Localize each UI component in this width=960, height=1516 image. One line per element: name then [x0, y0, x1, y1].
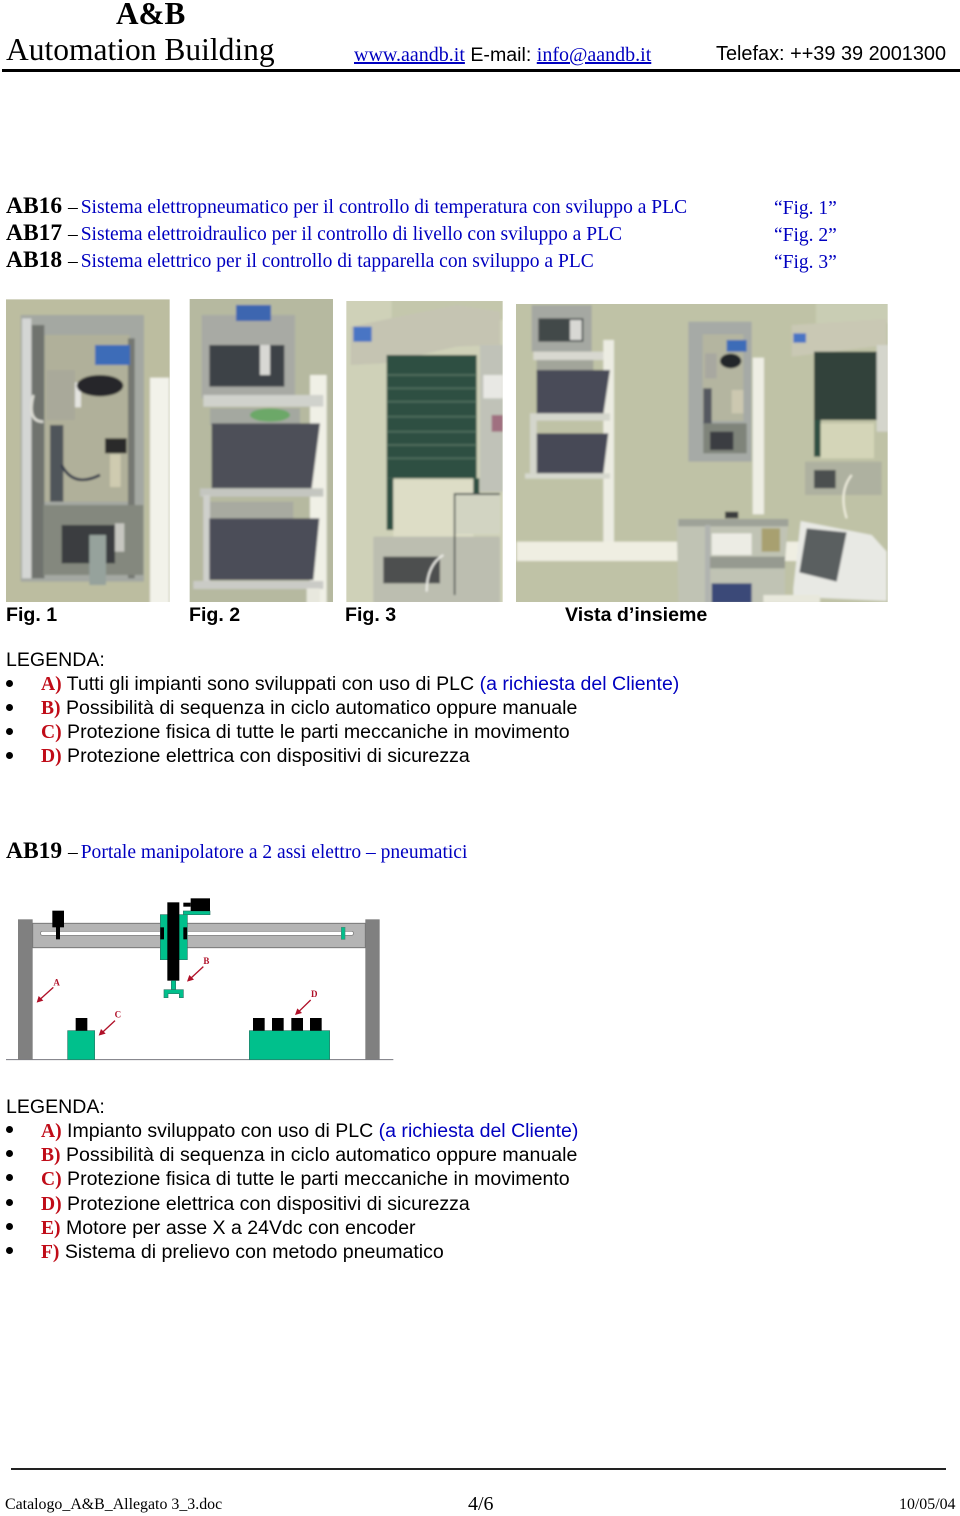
footer — [5, 1468, 956, 1515]
right block with sensors — [249, 1018, 330, 1060]
legend 2 item D: D) Protezione elettrica con dispositivi di sicurezza — [41, 1193, 470, 1215]
floor line — [6, 1058, 393, 1061]
figure captions — [6, 604, 707, 626]
callout arrows and letters: A — [53, 977, 60, 987]
photo: Fig. 3 roller shutter — [343, 298, 505, 605]
header rule — [2, 69, 960, 72]
legend 1 heading: LEGENDA: — [6, 649, 105, 671]
beam with slot — [33, 923, 365, 948]
legend 2 item C: C) Protezione fisica di tutte le parti meccaniche in movimento — [41, 1168, 570, 1190]
photo: Fig. 2 hydraulic rig — [187, 297, 335, 605]
left end motor — [52, 911, 64, 939]
legend 2 — [6, 1096, 578, 1263]
legend 2 heading: LEGENDA: — [6, 1096, 105, 1118]
legend 1 — [6, 649, 679, 767]
photo: overview of all rigs — [513, 302, 892, 605]
callout arrows and letters: D — [311, 989, 318, 999]
callout arrows and letters — [37, 956, 318, 1036]
AB16 figure reference: “Fig. 1” — [774, 198, 837, 219]
header: company name and contacts — [2, 0, 960, 72]
file name: Catalogo_A&B_Allegato 3_3.doc — [5, 1496, 222, 1513]
caption: Fig. 3: Fig. 3 — [345, 604, 396, 626]
legend 1 item A: A) Tutti gli impianti sono sviluppati con uso di PLC (a richiesta del Cliente) — [41, 673, 679, 695]
right end stop — [341, 927, 345, 939]
callout arrows and letters: B — [203, 956, 209, 966]
photo: Fig. 1 control panel — [3, 297, 173, 605]
AB18 line: AB18 – Sistema elettrico per il controllo di tapparella con sviluppo a PLC — [6, 247, 594, 273]
carriage with vertical axis and gripper — [160, 898, 210, 998]
legend 2 item B: B) Possibilità di sequenza in ciclo automatico oppure manuale — [41, 1144, 577, 1166]
AB19 heading: AB19 – Portale manipolatore a 2 assi elettro – pneumatici — [6, 838, 467, 864]
photo row — [6, 299, 888, 602]
legend 2 item E: E) Motore per asse X a 24Vdc con encoder — [41, 1217, 416, 1239]
web and email links: www.aandb.it E-mail: info@aandb.it — [354, 44, 651, 66]
left block with sensor — [68, 1018, 95, 1060]
AB17 line: AB17 – Sistema elettroidraulico per il controllo di livello con sviluppo a PLC — [6, 220, 622, 246]
caption: Fig. 1: Fig. 1 — [6, 604, 57, 626]
legend 1 item B: B) Possibilità di sequenza in ciclo automatico oppure manuale — [41, 697, 577, 719]
caption: Vista d'insieme: Vista d’insieme — [565, 604, 707, 626]
caption: Fig. 2: Fig. 2 — [189, 604, 240, 626]
product list: AB16 to AB18 — [6, 193, 837, 273]
diagram: two-axis manipulator — [6, 898, 394, 1060]
legend 2 item F: F) Sistema di prelievo con metodo pneumatico — [41, 1241, 444, 1263]
company name: Automation Building — [6, 32, 275, 67]
telefax: Telefax: ++39 39 2001300 — [716, 43, 946, 65]
legend 1 item D: D) Protezione elettrica con dispositivi di sicurezza — [41, 745, 470, 767]
portal columns — [18, 919, 380, 1060]
footer rule — [11, 1468, 946, 1470]
AB16 line: AB16 – Sistema elettropneumatico per il controllo di temperatura con sviluppo a PLC — [6, 193, 687, 219]
AB18 figure reference: “Fig. 3” — [774, 252, 837, 273]
AB17 figure reference: “Fig. 2” — [774, 225, 837, 246]
callout arrows and letters: C — [115, 1010, 121, 1020]
date: 10/05/04 — [899, 1496, 956, 1513]
page number: 4/6 — [468, 1493, 494, 1515]
legend 1 item C: C) Protezione fisica di tutte le parti meccaniche in movimento — [41, 721, 570, 743]
legend 2 item A: A) Impianto sviluppato con uso di PLC (a richiesta del Cliente) — [41, 1120, 578, 1142]
